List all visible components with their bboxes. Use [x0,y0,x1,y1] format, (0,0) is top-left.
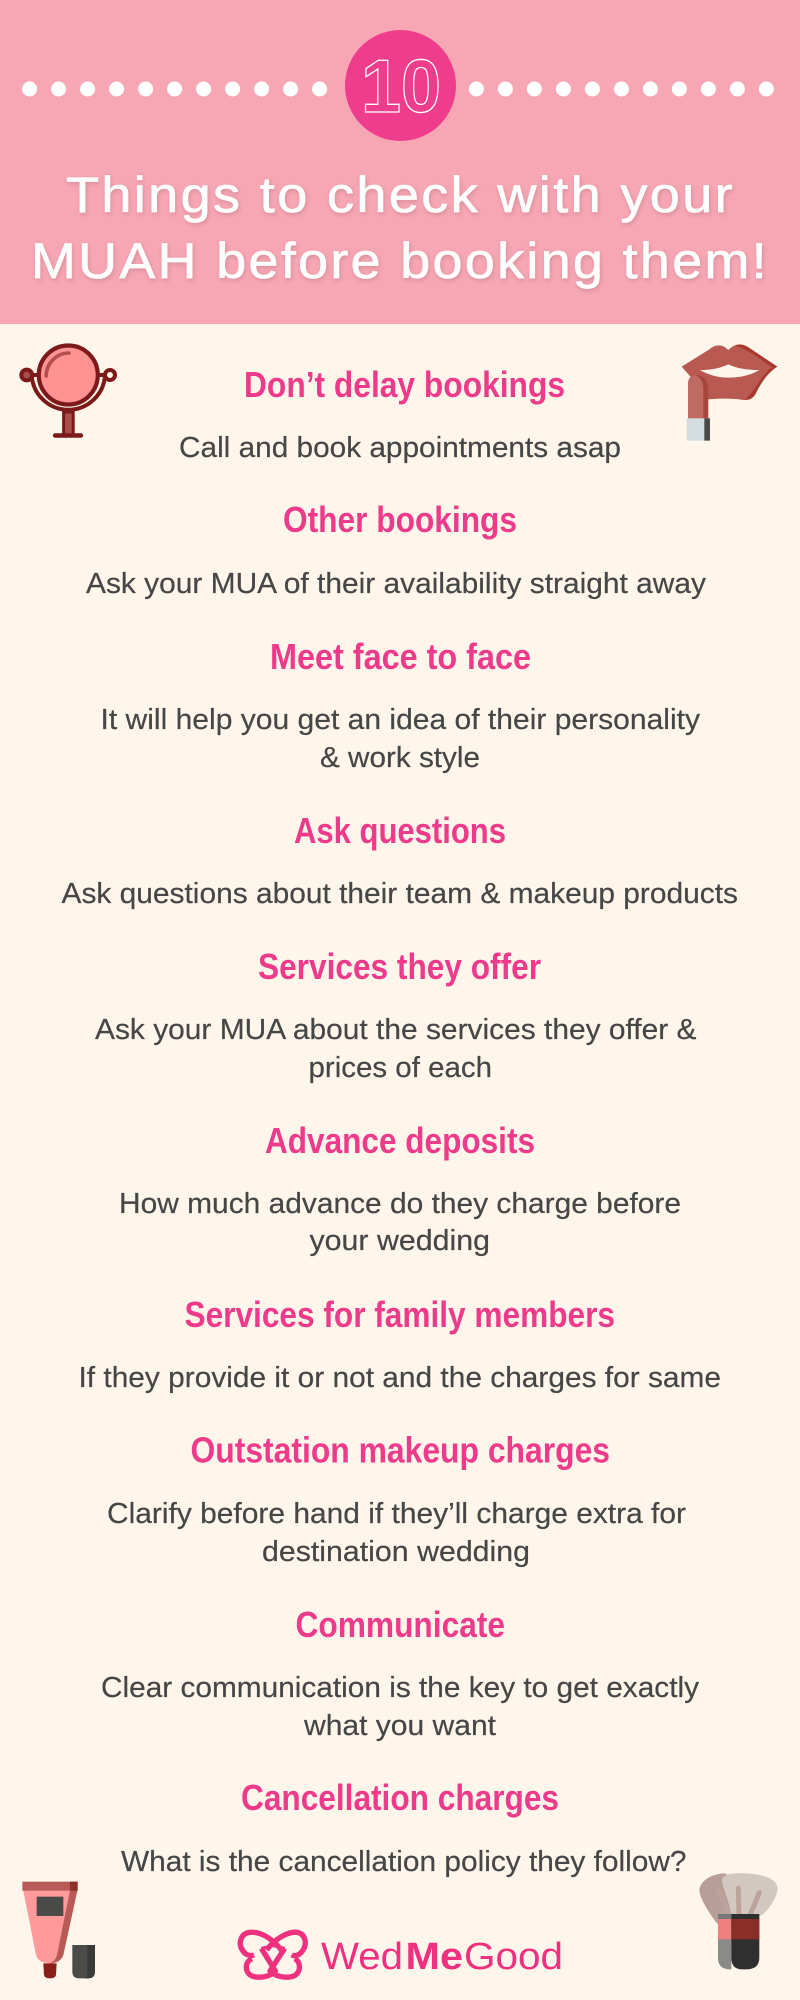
item 6: Advance deposits [119,1120,681,1257]
item 3: Meet face to face [100,636,701,774]
heading: Don’t delay bookings [244,364,565,405]
logo wordmark: Wed [321,1936,403,1978]
logo wordmark [321,1936,563,1978]
title: MUAH before booking them! [31,233,769,289]
description [100,704,701,774]
icon: cream tube [22,1882,95,1978]
description: what you want [303,1710,496,1742]
description: If they provide it or not and the charges for same [78,1362,721,1394]
item 8: Outstation makeup charges [107,1430,686,1568]
icon: mirror [21,346,115,436]
item 4: Ask questions [62,810,738,910]
description: Ask your MUA about the services they offer & [95,1014,696,1046]
heading: Outstation makeup charges [190,1430,610,1470]
logo: WedMeGood [240,1932,563,1978]
heading: Services they offer [258,946,541,987]
dotted line left [22,82,327,96]
title: Things to check with your [66,167,735,223]
heading: Cancellation charges [241,1777,559,1818]
description: your wedding [310,1225,490,1257]
icon: makeup brush [699,1873,778,1969]
number badge: 10 [345,30,456,141]
description: How much advance do they charge before [119,1188,681,1220]
heading: Advance deposits [265,1120,535,1161]
icon: lips and lipstick [682,344,777,441]
title [31,167,769,289]
description: Clear communication is the key to get exactly [101,1672,700,1704]
description: destination wedding [262,1536,530,1568]
description [119,1188,681,1257]
description: Ask your MUA of their availability straight away [86,568,707,600]
heading: Services for family members [184,1294,615,1335]
item 7: Services for family members [78,1294,721,1394]
description: Call and book appointments asap [179,432,621,464]
description [95,1014,696,1084]
logo mark [240,1932,305,1977]
heading: Ask questions [294,810,506,851]
description: Ask questions about their team & makeup products [62,878,738,910]
item 9: Communicate [101,1604,700,1742]
description: & work style [320,742,480,774]
item 1: Don't delay bookings [179,364,621,464]
description: prices of each [308,1052,492,1084]
panel: header banner [0,0,800,324]
heading: Communicate [296,1604,505,1645]
heading: Meet face to face [270,636,531,677]
description [101,1672,700,1742]
description [107,1498,686,1568]
logo wordmark: Good [464,1936,563,1978]
description: It will help you get an idea of their personality [100,704,701,736]
number badge: 10: 10 [361,44,441,128]
logo wordmark: Me [406,1936,463,1978]
item 5: Services they offer [95,946,696,1084]
dotted line right [469,82,774,96]
item 2: Other bookings [86,499,707,600]
item 10: Cancellation charges [121,1777,686,1878]
description: What is the cancellation policy they follow? [121,1846,686,1878]
heading: Other bookings [283,499,517,540]
description: Clarify before hand if they’ll charge extra for [107,1498,686,1530]
